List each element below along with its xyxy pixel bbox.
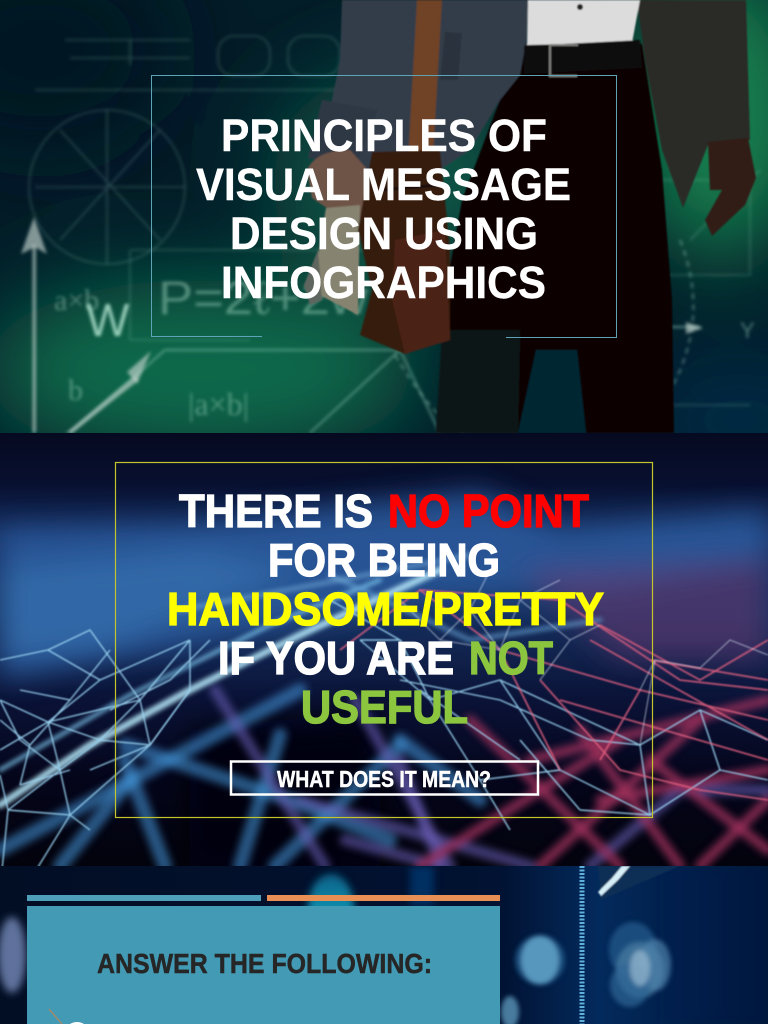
trousers xyxy=(436,44,674,433)
title: DESIGN USING xyxy=(230,208,538,259)
book xyxy=(317,204,362,316)
belt xyxy=(524,40,642,74)
title frame xyxy=(152,76,616,338)
right jacket panel xyxy=(637,0,750,208)
hand xyxy=(307,150,368,225)
title: INFOGRAPHICS xyxy=(221,257,546,308)
chalk equations xyxy=(54,271,755,422)
left jacket xyxy=(322,0,528,170)
quote text: THERE IS xyxy=(179,485,373,537)
dot-matrix light panel xyxy=(598,866,680,900)
chalk equations: |a×b| xyxy=(188,386,249,422)
quote text xyxy=(167,485,604,733)
quote text: NO POINT xyxy=(388,485,589,537)
green glow background xyxy=(0,0,768,480)
quote text: NOT xyxy=(469,632,553,684)
bright diagonal streak xyxy=(0,555,600,805)
man with satchel photo xyxy=(304,0,756,433)
button: what does it mean xyxy=(231,762,538,794)
quote text: USEFUL xyxy=(301,681,468,733)
blurred blue haze bands xyxy=(0,490,768,866)
blurred foreground mesh: thick lines xyxy=(0,690,768,866)
icon: partial pin xyxy=(49,1009,91,1024)
leg gap xyxy=(518,350,586,433)
quote frame xyxy=(116,462,652,818)
sharp mesh: blue xyxy=(0,600,768,890)
chalk equations: a×b xyxy=(54,284,99,317)
beaded vertical light xyxy=(580,866,584,1024)
quote text: FOR BEING xyxy=(268,534,500,586)
accent bars xyxy=(27,895,500,901)
panel: answer section background xyxy=(0,866,768,1024)
sharp mesh: red and pink xyxy=(340,590,768,800)
chalk equations: P=2ℓ+2w xyxy=(158,271,369,324)
panel: answer card xyxy=(27,906,500,1024)
chalk equations: 8 xyxy=(530,335,541,360)
satchel xyxy=(358,150,450,354)
quote text: IF YOU ARE xyxy=(218,632,454,684)
shirt xyxy=(527,0,640,45)
quote text: HANDSOME/PRETTY xyxy=(167,583,604,635)
panel: title section xyxy=(0,0,768,480)
panel: network quote section xyxy=(0,433,768,890)
title: PRINCIPLES OF xyxy=(221,110,547,161)
denim left leg xyxy=(436,330,520,433)
heading: ANSWER THE FOLLOWING: xyxy=(97,948,432,979)
chalk equations: W xyxy=(86,294,130,346)
chalkboard math formulas background xyxy=(29,36,760,433)
chalk equations: Y xyxy=(740,318,755,343)
bokeh lights xyxy=(0,866,768,1024)
chalk arrows xyxy=(21,217,703,433)
title xyxy=(196,110,571,308)
strap xyxy=(408,0,442,160)
title: VISUAL MESSAGE xyxy=(196,159,571,210)
button: what does it mean: WHAT DOES IT MEAN? xyxy=(277,766,491,792)
chalk equations: b xyxy=(68,374,83,407)
